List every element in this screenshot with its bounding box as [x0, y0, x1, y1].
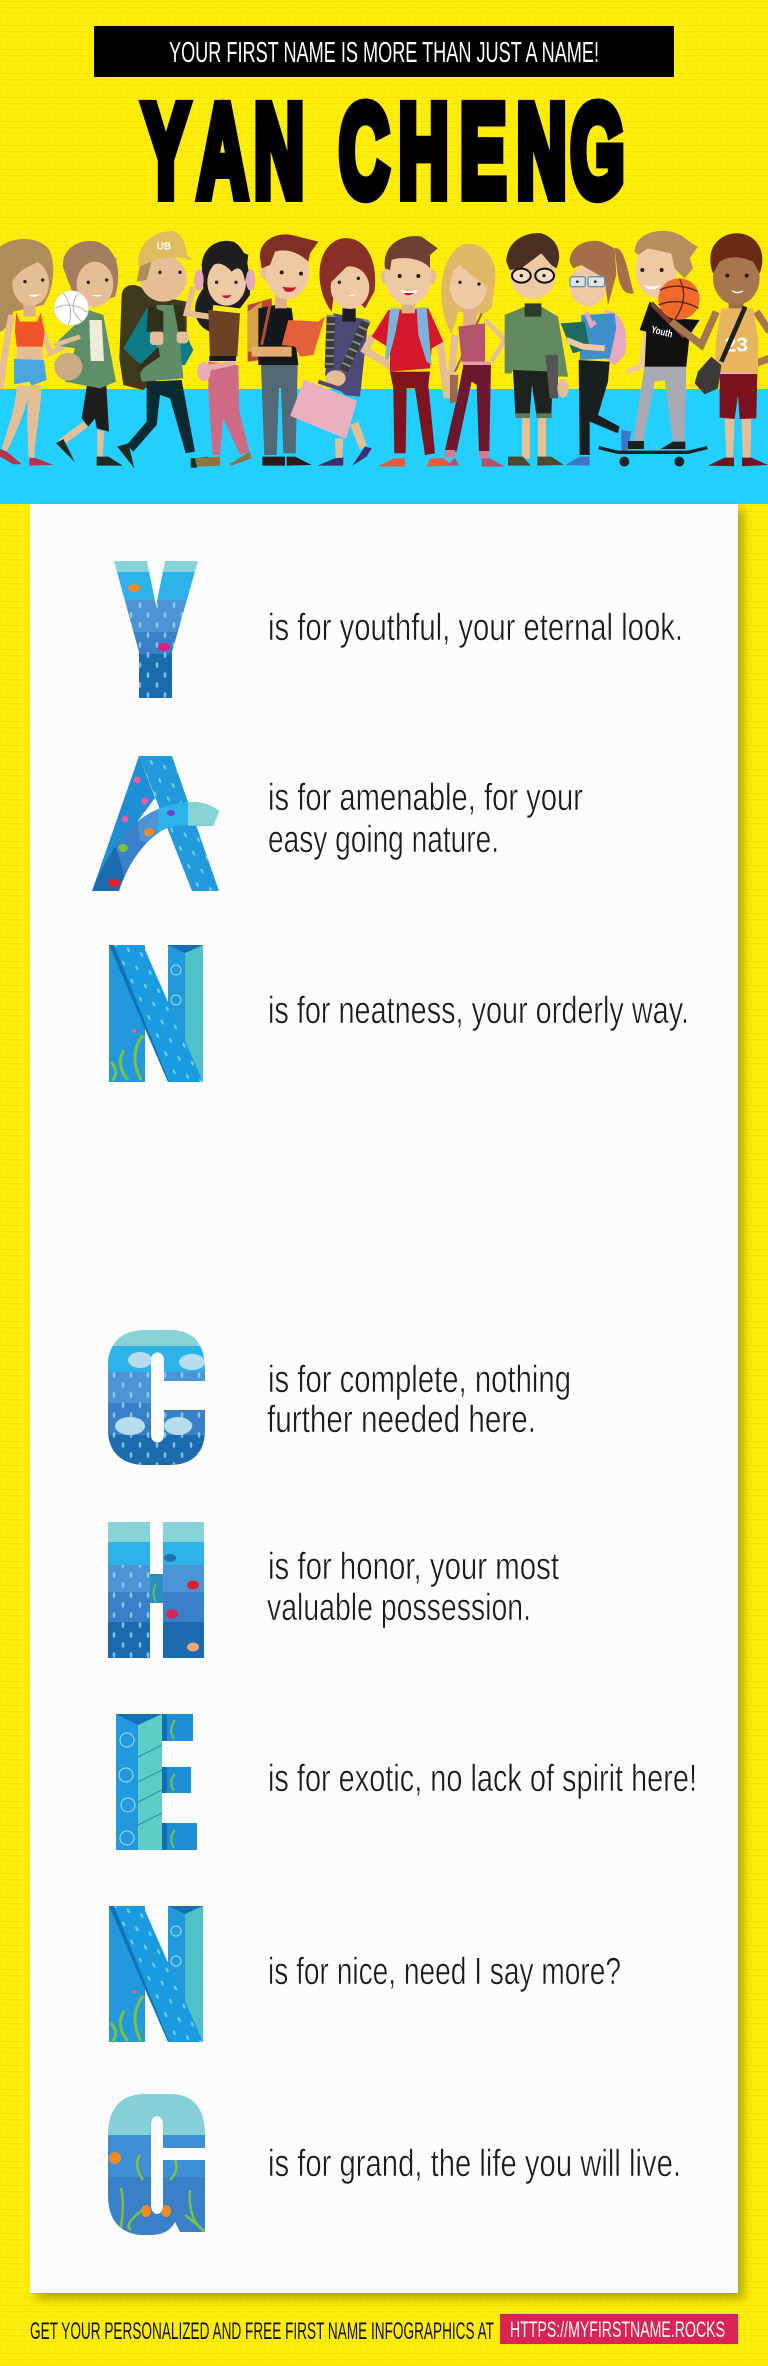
text: H lines: valuable possession.: [267, 1587, 531, 1629]
illustration: group of young people: [0, 231, 768, 468]
text: A lines: is for amenable, for your: [268, 777, 583, 819]
top banner: tagline: [94, 26, 674, 77]
letter N (second): [109, 1906, 203, 2042]
person: skateboarder with basketball: [599, 231, 707, 467]
main white panel: [30, 504, 738, 2293]
white panel drop shadow: [36, 510, 744, 2299]
person: boy in red shirt: [365, 236, 453, 467]
title: name: YAN CHENG: [143, 79, 624, 225]
person: girl in orange top: [0, 239, 78, 466]
person: boy in yellow tank top: 23: [725, 335, 748, 357]
text: A lines: [268, 777, 583, 861]
person: blonde girl: [441, 244, 505, 467]
text: N line second: is for nice, need I say more?: [268, 1951, 621, 1993]
person: hiker with cap and backpack: [117, 231, 208, 468]
person: boy with glasses: [505, 233, 569, 466]
person: hiker with cap and backpack: UB: [157, 242, 171, 253]
letter E: [116, 1714, 197, 1850]
person: skateboarder with basketball: Youth: [650, 325, 674, 340]
text: C lines: is for complete, nothing: [268, 1359, 571, 1401]
text: C lines: further needed here.: [267, 1399, 536, 1441]
person: girl with volleyball: [54, 241, 123, 466]
person: girl with headphones: [187, 241, 255, 467]
letter Y: [114, 561, 198, 698]
person: boy in yellow tank top: [671, 233, 768, 466]
letter C: [106, 1328, 208, 1467]
person: girl with pink bag: [292, 238, 375, 466]
text: H lines: is for honor, your most: [268, 1546, 559, 1588]
letter H: [106, 1520, 206, 1660]
person: girl with tablet and ponytail: [561, 241, 634, 466]
blue floor band: [0, 389, 768, 504]
text: C lines: [267, 1359, 571, 1441]
text: H lines: [267, 1546, 559, 1629]
letter A: [88, 756, 225, 895]
text: A lines: easy going nature.: [268, 819, 499, 861]
person: boy with backpack and book: [248, 234, 325, 466]
letter N: [109, 945, 203, 1082]
letter G: [106, 2092, 208, 2237]
